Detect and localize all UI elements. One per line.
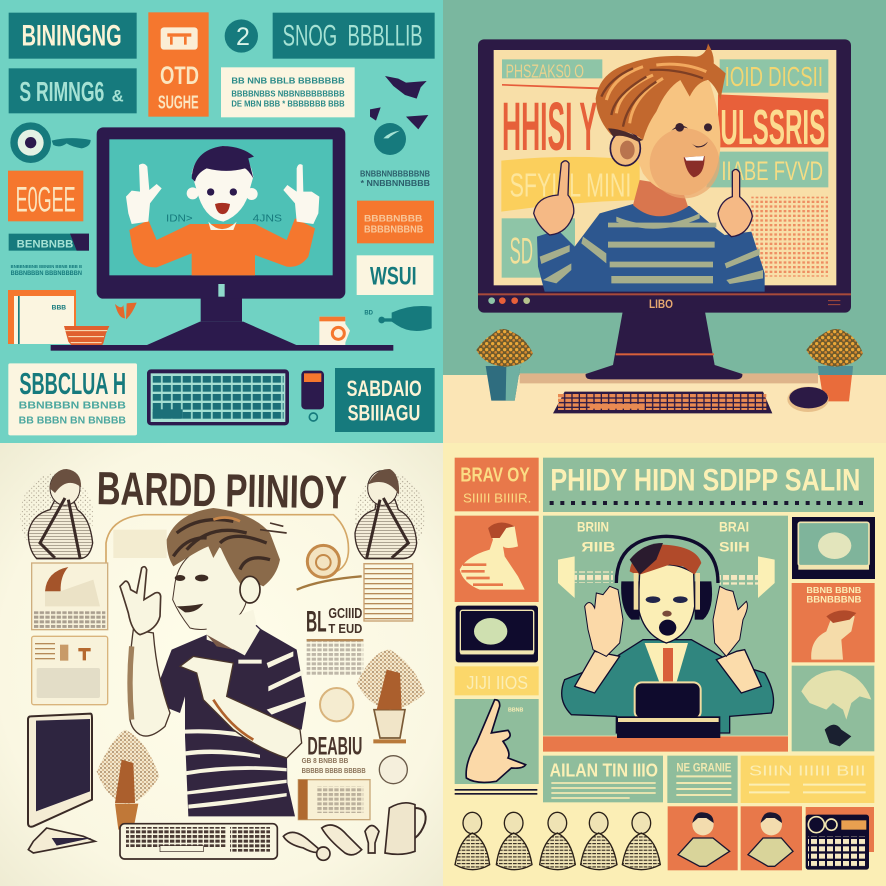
icon: magnifier glasses (14, 126, 91, 159)
banner: S RIMNG6 (9, 68, 137, 113)
small text block (11, 264, 83, 277)
title banner: PHIDY HIDN SDIPP SALIN (543, 458, 874, 512)
text card: green: NE GRANIE (676, 760, 731, 774)
labels: left: ЯIIB (581, 539, 615, 555)
card: man with glasses one (668, 806, 738, 870)
card: pointing hand (455, 699, 539, 795)
hand: left (585, 586, 623, 656)
text: DEABIU (302, 734, 366, 775)
boy: cheering with striped sweater (534, 43, 765, 292)
orange text card: BBBBNBBB (364, 213, 423, 223)
screen banner: SFYLL MINI (501, 157, 640, 212)
shirt and tie (645, 643, 688, 683)
banner: SABDAIO SBIIIAGU: SABDAIO (347, 376, 422, 401)
card: chart (298, 780, 370, 820)
text: BLGCIIID EUD: GCIIID (328, 606, 362, 622)
hand: right pointing (718, 169, 752, 237)
text card: SBBCLUA H (8, 363, 137, 435)
monitor stand (586, 310, 742, 379)
orange text card: BBBBNBBNB (364, 225, 423, 236)
panel: bottom-right retro poster (443, 443, 886, 886)
raised arm (129, 630, 170, 736)
card: monitor top right (792, 517, 875, 579)
figure 3 (540, 812, 575, 870)
small text block: BBBNBBBN BBBNBBBBN (11, 270, 82, 277)
red rule (502, 84, 600, 89)
banner: SABDAIO SBIIIAGU (335, 368, 435, 432)
text: DEABIU: BBBBB BBBB BBBBB (302, 766, 366, 775)
desktop computer (28, 714, 95, 853)
mouth (684, 156, 705, 177)
screen panel: script: SD (510, 230, 533, 271)
label card: WSUI (357, 255, 433, 295)
icon: notebook and bowl: BBB (52, 304, 66, 311)
boy: striped polo (120, 508, 306, 816)
folded arm (180, 656, 302, 758)
mice and accessories (283, 825, 379, 860)
labels: left: BRIIN (577, 518, 609, 534)
card: globe (792, 666, 874, 751)
shirt (160, 625, 306, 816)
text card: yellow: SIIIN IIIIII BIII (749, 764, 866, 780)
face (173, 543, 248, 629)
eyes, nose, mouth (646, 596, 688, 636)
yellow label (455, 666, 539, 695)
figure 1 (455, 812, 490, 870)
jug (385, 803, 426, 854)
text card: SBBCLUA H: BBNBBBN BBNBB (19, 401, 126, 412)
right small text (360, 169, 430, 188)
text card: BB NNB BBLB BBBBBBB (231, 75, 345, 85)
icon: notebook and bowl (8, 290, 109, 348)
screen banner: SFYLL MINI: SFYILL MINI (510, 168, 631, 205)
banner: S RIMNG6: & (112, 87, 124, 106)
heading banner: BININGNG (9, 13, 137, 59)
heading banner: SNOG BBBLLIB (273, 13, 435, 59)
figure: top right man (355, 469, 425, 560)
arrow graphic: left (558, 556, 613, 598)
orange text card (357, 201, 434, 243)
screen panel: script (502, 218, 575, 278)
keyboard (147, 369, 289, 425)
info card: hand (32, 563, 108, 630)
card: man with glasses two (741, 806, 802, 870)
face (630, 75, 720, 195)
monitor (51, 127, 393, 351)
small text block: BNBBNBBNB BBNBN BBNB BBB B (11, 264, 83, 269)
text card: BBBBNBBS NBBNBBBBBBBB (231, 88, 345, 98)
screen banner: HIABE FVVD (706, 152, 828, 187)
panel: top-left teal infographic (0, 0, 443, 443)
keyboard (120, 824, 277, 859)
icon: birds and globe (370, 76, 428, 155)
face (638, 565, 695, 643)
figure 5 (622, 812, 660, 870)
desk (443, 375, 886, 443)
strip label: BENBNBB (17, 238, 74, 250)
forearm right (716, 650, 761, 693)
orange label: E0GEE: E0GEE (16, 181, 76, 220)
orange card: OTD SUGHE: OTD (160, 62, 199, 90)
icon: spiral (297, 545, 362, 590)
neck (633, 180, 688, 216)
right small text: BNBBNNBBBBBNB (360, 169, 430, 179)
screen labels: IDN> (166, 213, 193, 224)
card: control panel (806, 807, 874, 870)
text card: DE MBN BBB * BBBBBBB BBB (231, 100, 345, 109)
card: BRAV OY: BRAV OY (460, 463, 530, 486)
hair dark (630, 543, 663, 575)
monitor: HHISI Y (502, 89, 597, 165)
heading banner: BININGNG: BININGNG (22, 19, 122, 52)
labels: right (719, 518, 750, 555)
text card: AILAN TIN IIIO: AILAN TIN IIIO (550, 759, 658, 780)
plant: left pot (97, 730, 159, 830)
hair (630, 545, 701, 575)
headphones (616, 536, 718, 620)
text: BLGCIIID EUD: BL (306, 605, 327, 638)
heading: BARDD PIINIOY: BARDD PIINIOY (96, 462, 347, 519)
labels: left (577, 518, 615, 555)
card: orange portrait: BBNB BBNB (806, 585, 861, 595)
monitor controls and logo: LIBO (649, 297, 673, 311)
screen headline: ULSSRIS (718, 94, 828, 155)
screen banner: top right: IOID DICSII (725, 61, 823, 92)
monitor controls and logo (488, 297, 840, 311)
laptop (617, 682, 720, 738)
icon: mouse (301, 371, 324, 421)
sweater (537, 204, 765, 292)
figure 2 (496, 812, 532, 870)
hand: left pointing (534, 161, 574, 235)
banner: SABDAIO SBIIIAGU: SBIIIAGU (348, 401, 420, 426)
plant: left pot (476, 329, 533, 401)
orange card: OTD SUGHE: SUGHE (158, 91, 199, 112)
icon: speaker: BD (364, 310, 374, 316)
text card: SBBCLUA H: BB BBBN BN BNBBB (19, 415, 126, 426)
panel: bottom-left line-art poster (0, 443, 443, 886)
yellow label: JIJI IIOS (466, 672, 528, 693)
eyes and nose (671, 123, 712, 147)
boy: orange sweater waving (126, 146, 319, 275)
icon: mug (319, 317, 350, 345)
heading banner: SNOG BBBLLIB: SNOG BBBLLIB (283, 19, 423, 52)
card: orange portrait: BBNBBBNB (806, 594, 862, 604)
text card (221, 67, 355, 117)
text: DEABIU: DEABIU (307, 734, 362, 761)
card: man profile (455, 516, 539, 602)
figure: top left man (20, 469, 93, 560)
screen data grid (751, 197, 828, 277)
panel: top-right monitor scene (443, 0, 886, 443)
icon: numbered circle (225, 19, 258, 53)
right small text: * NNBBNNBBBB (361, 179, 430, 188)
card: BRAV OY (455, 458, 539, 511)
screen banner: top right (720, 59, 828, 93)
monitor (478, 39, 851, 313)
desk shadow (520, 373, 818, 383)
frame curve (106, 515, 348, 576)
icon: speaker (364, 306, 432, 331)
eyes and mouth (175, 575, 208, 612)
jacket (562, 640, 774, 733)
lined card (364, 564, 413, 621)
hair (167, 508, 287, 590)
labels: right: SIIH (719, 539, 750, 555)
orange card: OTD SUGHE (148, 12, 209, 117)
icon: orange leaf (115, 303, 137, 319)
info card: map (32, 636, 108, 705)
labels: right: BRAI (719, 518, 749, 534)
text card: yellow (741, 756, 874, 803)
hand: raised fingers (120, 567, 161, 635)
text: BLGCIIID EUD: T EUD (328, 621, 363, 636)
text lines block (307, 639, 363, 675)
orange label: E0GEE (8, 171, 83, 221)
card: monitor (456, 606, 538, 662)
arrow graphic: right (720, 556, 775, 598)
row of small seated figures (455, 812, 660, 870)
card: pointing hand: BBNB (508, 707, 524, 713)
icon: medallion (320, 688, 407, 784)
text card: SBBCLUA H: SBBCLUA H (19, 367, 126, 401)
text card: green (667, 756, 738, 803)
card: BRAV OY: SIIIII BIIIIR. (463, 491, 531, 505)
screen banner: top left: PHSZAKS0 O (506, 60, 584, 81)
banner: S RIMNG6: S RIMNG6 (19, 76, 104, 107)
figure 4 (581, 812, 617, 870)
mouse (787, 387, 829, 412)
text card: AILAN TIN IIIO (543, 756, 663, 802)
label card: WSUI: WSUI (370, 262, 417, 290)
plant: right urn (357, 650, 425, 741)
strip label (9, 234, 89, 251)
screen labels (166, 213, 282, 224)
ear (610, 131, 640, 166)
ear (240, 576, 260, 603)
hair (596, 43, 726, 140)
hand: right (713, 586, 747, 656)
icon: numbered circle: 2 (236, 23, 250, 51)
plant: right pot (806, 329, 863, 401)
boy: headphones and teal jacket (562, 536, 774, 738)
main panel (543, 516, 788, 752)
graphic: curved banner (113, 530, 167, 558)
keyboard (553, 392, 772, 413)
text: DEABIU: GB 8 BNBB BB (302, 756, 348, 765)
card: orange portrait (792, 583, 875, 662)
screen banner: HIABE FVVD: IIABE FVVD (721, 156, 823, 186)
collar (233, 620, 261, 656)
forearm left (575, 651, 620, 693)
screen labels: 4JNS (253, 213, 282, 224)
